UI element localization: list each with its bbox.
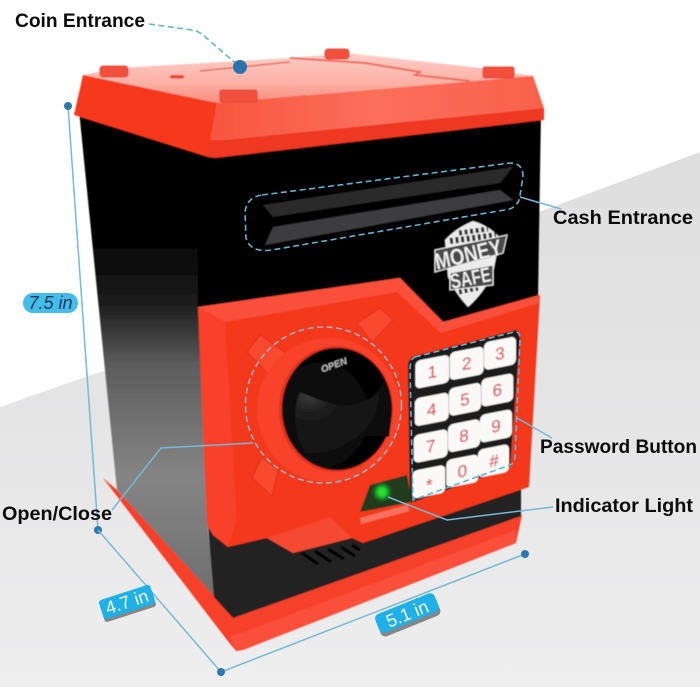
callout: cash entrance: Cash Entrance (553, 208, 693, 229)
logo banners (435, 235, 507, 290)
key 8 (448, 419, 480, 453)
keypad (408, 330, 520, 502)
front face of body (197, 112, 541, 322)
callout: indicator light: Indicator Light (555, 496, 694, 517)
key 5: 5 (460, 389, 470, 410)
key 5 (449, 382, 481, 416)
small top notch (170, 75, 184, 78)
key hash (478, 444, 509, 478)
lid ridge (290, 58, 470, 81)
lower black band (208, 485, 521, 618)
dial tabs (247, 308, 393, 496)
dial knob (282, 348, 392, 470)
money safe logo: MONEY (432, 234, 504, 275)
vents (302, 545, 360, 564)
key 7: 7 (426, 435, 435, 457)
key 2: 2 (462, 353, 471, 374)
lid top surface (83, 53, 533, 103)
knob label: OPEN (320, 355, 350, 375)
depth and width dimension lines (98, 530, 529, 676)
indicator lip (360, 505, 410, 524)
money safe logo: SAFE (448, 263, 493, 294)
key 1: 1 (428, 361, 437, 383)
key 4 (415, 392, 449, 427)
key 4: 4 (427, 398, 437, 420)
callout: coin entrance: Coin Entrance (15, 11, 145, 32)
key 8: 8 (459, 425, 469, 447)
indicator green light (371, 481, 393, 503)
base plate (103, 478, 522, 651)
knob handle (295, 380, 391, 460)
lid left face (74, 75, 217, 157)
corner studs (100, 49, 514, 102)
key star: * (426, 474, 433, 495)
base front highlight (230, 530, 516, 651)
badge: 4.7 in: 4.7 in (103, 586, 151, 618)
callout: password button (410, 332, 697, 500)
slot and bezel (263, 167, 513, 245)
badge: 4.7 in (98, 584, 157, 623)
key hash: # (489, 450, 499, 472)
key 3: 3 (495, 343, 505, 364)
indicator light recess (360, 475, 412, 512)
lid front lower band (208, 108, 544, 158)
money safe logo (432, 221, 507, 307)
front edge ridge (250, 96, 306, 101)
product: money safe (74, 49, 544, 651)
key 6 (481, 373, 513, 407)
panel left strip (198, 307, 237, 547)
callout: coin entrance (15, 11, 247, 74)
key 3 (484, 336, 516, 370)
key 2 (450, 346, 484, 381)
key 1 (415, 354, 449, 389)
key 9: 9 (491, 415, 501, 437)
key 0: 0 (458, 460, 467, 482)
badge: 5.1 in: 5.1 in (383, 596, 432, 631)
dial ring inner shadow (279, 346, 393, 472)
background floor (0, 152, 700, 687)
panel top bevel (198, 278, 539, 333)
left side of body (79, 110, 216, 598)
key 9 (480, 409, 512, 443)
badge: 7.5 in: 7.5 in (28, 293, 73, 313)
callout: cash entrance (245, 163, 693, 250)
lid front upper face (210, 76, 544, 140)
logo diamond pattern (450, 229, 496, 292)
callout: indicator light (388, 496, 694, 520)
key star (412, 465, 445, 499)
panel lower bevel (267, 517, 352, 553)
callout: open/close (2, 327, 402, 525)
dial ring (257, 338, 401, 482)
key 7 (414, 429, 448, 463)
red front panel (198, 278, 540, 553)
height dimension line (64, 102, 102, 534)
key 6: 6 (493, 379, 502, 401)
coin slot (200, 62, 290, 71)
callout: password button: Password Button (540, 437, 697, 458)
callout: open/close: Open/Close (2, 504, 112, 525)
badge: 5.1 in (374, 592, 442, 638)
key 0 (446, 454, 478, 488)
